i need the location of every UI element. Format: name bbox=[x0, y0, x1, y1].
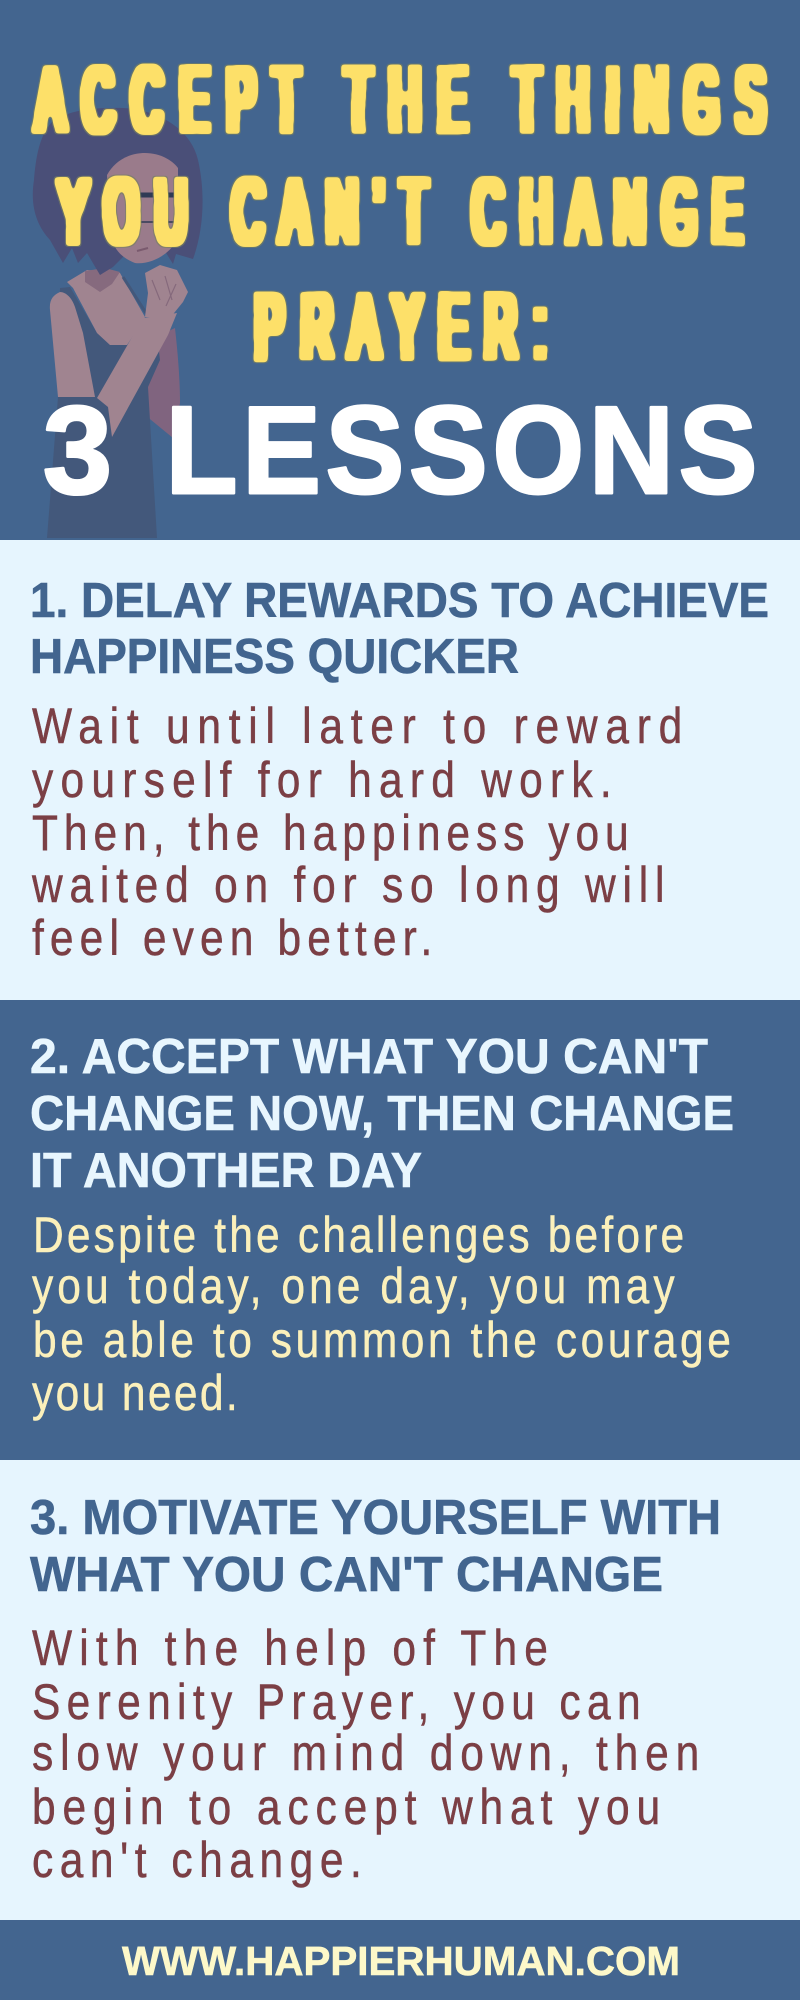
panel: lesson 1 bbox=[0, 540, 800, 1000]
body: lesson 3: can't change. bbox=[32, 1832, 362, 1888]
body: lesson 1: waited on for so long will bbox=[31, 857, 664, 913]
panel: lesson 3 bbox=[0, 1460, 800, 1920]
body: lesson 1: feel even better. bbox=[32, 910, 432, 966]
title: prayer: PRAYER: bbox=[255, 276, 546, 378]
body: lesson 1: yourself for hard work. bbox=[32, 752, 612, 808]
body: lesson 2: you need. bbox=[32, 1365, 238, 1421]
heading: lesson 1 bbox=[30, 574, 769, 684]
body: lesson 2: you today, one day, you may bbox=[32, 1258, 675, 1314]
heading: lesson 2: IT ANOTHER DAY bbox=[30, 1144, 422, 1198]
body: lesson 2: be able to summon the courage bbox=[33, 1312, 731, 1368]
panel: footer bbox=[0, 1920, 800, 2000]
panel: lesson 2 bbox=[0, 1000, 800, 1460]
heading: lesson 3: 3. MOTIVATE YOURSELF WITH bbox=[30, 1491, 721, 1545]
body: lesson 3: begin to accept what you bbox=[32, 1779, 660, 1835]
body: lesson 2: Despite the challenges before bbox=[33, 1207, 684, 1263]
body: lesson 3: slow your mind down, then bbox=[32, 1725, 699, 1781]
subtitle: 3 lessons: LESSONS bbox=[166, 381, 757, 520]
heading: lesson 1: HAPPINESS QUICKER bbox=[30, 630, 519, 684]
heading: lesson 2: 2. ACCEPT WHAT YOU CAN'T bbox=[30, 1030, 708, 1084]
heading: lesson 3: WHAT YOU CAN'T CHANGE bbox=[30, 1548, 663, 1602]
heading: lesson 2 bbox=[30, 1030, 734, 1198]
title: accept the things: ACCEPT THE THINGS bbox=[36, 49, 765, 151]
heading: lesson 2: CHANGE NOW, THEN CHANGE bbox=[30, 1087, 734, 1141]
body: lesson 1 bbox=[31, 698, 682, 966]
title group bbox=[36, 49, 765, 378]
panel: header bbox=[0, 0, 800, 540]
body: lesson 3: Serenity Prayer, you can bbox=[32, 1674, 641, 1730]
body: lesson 3 bbox=[32, 1620, 699, 1888]
body: lesson 2 bbox=[32, 1207, 731, 1421]
heading: lesson 3 bbox=[30, 1491, 721, 1602]
heading: lesson 1: 1. DELAY REWARDS TO ACHIEVE bbox=[30, 574, 769, 628]
footer url: WWW.HAPPIERHUMAN.COM bbox=[122, 1938, 680, 1984]
title: you can't change: YOU CAN’T CHANGE bbox=[59, 161, 742, 263]
illustration: praying woman bbox=[33, 108, 203, 538]
subtitle: 3 lessons: 3 bbox=[43, 382, 112, 520]
body: lesson 3: With the help of The bbox=[32, 1620, 548, 1676]
body: lesson 1: Wait until later to reward bbox=[32, 698, 682, 754]
body: lesson 1: Then, the happiness you bbox=[32, 805, 629, 861]
